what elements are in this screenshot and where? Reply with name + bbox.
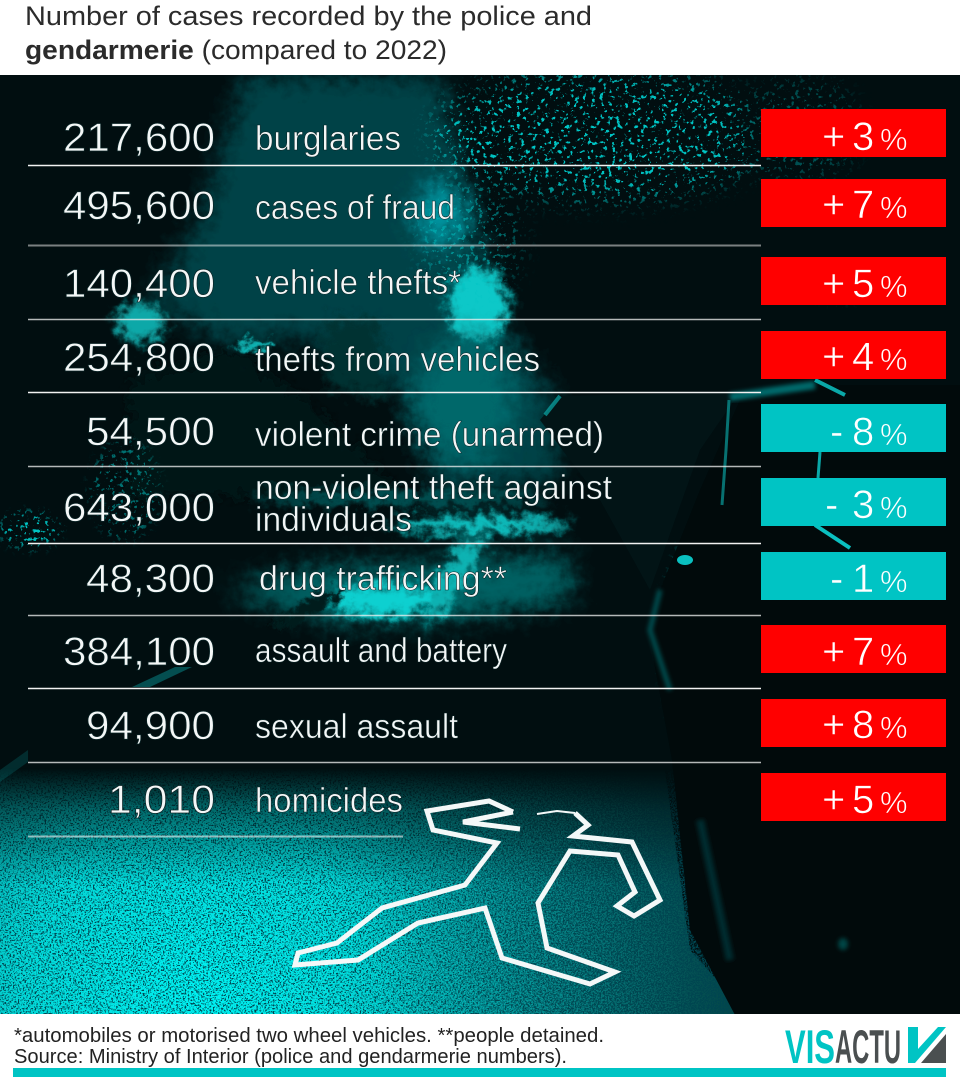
- row: violent crime: [86, 410, 604, 454]
- badge +8%: 8: [852, 703, 874, 747]
- row: thefts from vehicles: [63, 336, 540, 380]
- badge +7%: [761, 179, 946, 227]
- ground asphalt: [0, 750, 735, 1015]
- badge +7%: +: [822, 183, 845, 227]
- row: drug trafficking: 48,300: [86, 557, 215, 601]
- row: assault and battery: [63, 630, 507, 674]
- badge +4%: %: [880, 342, 908, 377]
- footer panel: [0, 1014, 960, 1088]
- row: burglaries: burglaries: [255, 120, 401, 158]
- badge -8%: [761, 404, 946, 454]
- row: sexual assault: sexual assault: [255, 708, 459, 746]
- logo: VISACTU: VIS: [785, 1020, 835, 1073]
- row: drug trafficking: [86, 557, 507, 601]
- row: homicides: 1,010: [108, 778, 215, 822]
- badge +5%: 5: [852, 262, 874, 306]
- badge +8%: %: [880, 710, 908, 745]
- row: vehicle thefts: 140,400: [63, 262, 215, 306]
- badge +7%: %: [880, 637, 908, 672]
- footnote: *automobiles or motorised two wheel vehicles. **people detained.: [14, 1025, 604, 1047]
- chalk body outline: [295, 801, 660, 984]
- logo: VISACTU: [785, 1020, 946, 1073]
- row: violent crime: violent crime (unarmed): [255, 416, 604, 454]
- badge -1%: -: [830, 557, 843, 601]
- row: assault and battery: 384,100: [63, 630, 215, 674]
- foliage specks: [0, 75, 864, 578]
- source: Source: Ministry of Interior (police and gendarmerie numbers).: [14, 1046, 567, 1068]
- badge +3%: +: [822, 115, 845, 159]
- row: vehicle thefts: [63, 262, 461, 306]
- badge +4%: [761, 331, 946, 379]
- badge +7%: [761, 625, 946, 674]
- badge +5%: +: [822, 262, 845, 306]
- badge -8%: 8: [852, 410, 874, 454]
- badge -3%: 3: [852, 483, 874, 527]
- badge +3%: %: [880, 122, 908, 157]
- badge +5%: [761, 773, 946, 822]
- badge -1%: 1: [852, 557, 874, 601]
- car silhouette: [650, 385, 960, 1015]
- row dividers: [28, 166, 761, 836]
- badge +8%: [761, 699, 946, 747]
- row: sexual assault: 94,900: [86, 704, 215, 748]
- badge +3%: 3: [852, 115, 874, 159]
- subtitle: gendarmerie (compared to 2022): [25, 35, 447, 65]
- light haze and trees: [116, 75, 570, 625]
- row: sexual assault: [86, 704, 459, 748]
- badge +5%: [761, 257, 946, 306]
- badge -8%: -: [830, 410, 843, 454]
- badge +8%: +: [822, 703, 845, 747]
- row: vehicle thefts: vehicle thefts*: [255, 264, 461, 302]
- row: assault and battery: assault and battery: [255, 632, 507, 670]
- title: Number of cases recorded by the police and: [25, 1, 592, 31]
- road stripe: [132, 667, 192, 687]
- data rows: [63, 116, 613, 822]
- row: burglaries: [63, 116, 401, 160]
- row: thefts from vehicles: 254,800: [63, 336, 215, 380]
- change badges: [761, 109, 946, 822]
- badge +7%: %: [880, 190, 908, 225]
- badge +5%: 5: [852, 778, 874, 822]
- badge +7%: 7: [852, 183, 874, 227]
- badge +3%: [761, 109, 946, 159]
- row: violent crime: 54,500: [86, 410, 215, 454]
- badge -1%: [761, 552, 946, 601]
- row: non-violent theft: [63, 469, 613, 539]
- row: thefts from vehicles: thefts from vehicles: [255, 341, 540, 379]
- badge +7%: 7: [852, 630, 874, 674]
- row: cases of fraud: 495,600: [63, 184, 215, 228]
- badge +5%: %: [880, 269, 908, 304]
- row: non-violent theft: individuals: [255, 501, 412, 539]
- row: non-violent theft: 643,000: [63, 486, 215, 530]
- badge +5%: %: [880, 785, 908, 820]
- row: cases of fraud: cases of fraud: [255, 189, 455, 227]
- row: homicides: homicides: [255, 782, 403, 820]
- badge -3%: %: [880, 490, 908, 525]
- badge +4%: +: [822, 335, 845, 379]
- badge -1%: %: [880, 564, 908, 599]
- badge -3%: -: [825, 483, 838, 527]
- row: homicides: [108, 778, 403, 822]
- badge -8%: %: [880, 417, 908, 452]
- header panel: [0, 0, 960, 75]
- row: non-violent theft: non-violent theft against: [255, 469, 613, 507]
- footer bar: [13, 1068, 946, 1077]
- road light: [390, 516, 570, 534]
- badge +7%: +: [822, 630, 845, 674]
- row: cases of fraud: [63, 184, 455, 228]
- row: drug trafficking: drug trafficking**: [259, 560, 507, 598]
- badge +5%: +: [822, 778, 845, 822]
- badge -3%: [761, 478, 946, 527]
- row: burglaries: 217,600: [63, 116, 215, 160]
- badge +4%: 4: [852, 335, 874, 379]
